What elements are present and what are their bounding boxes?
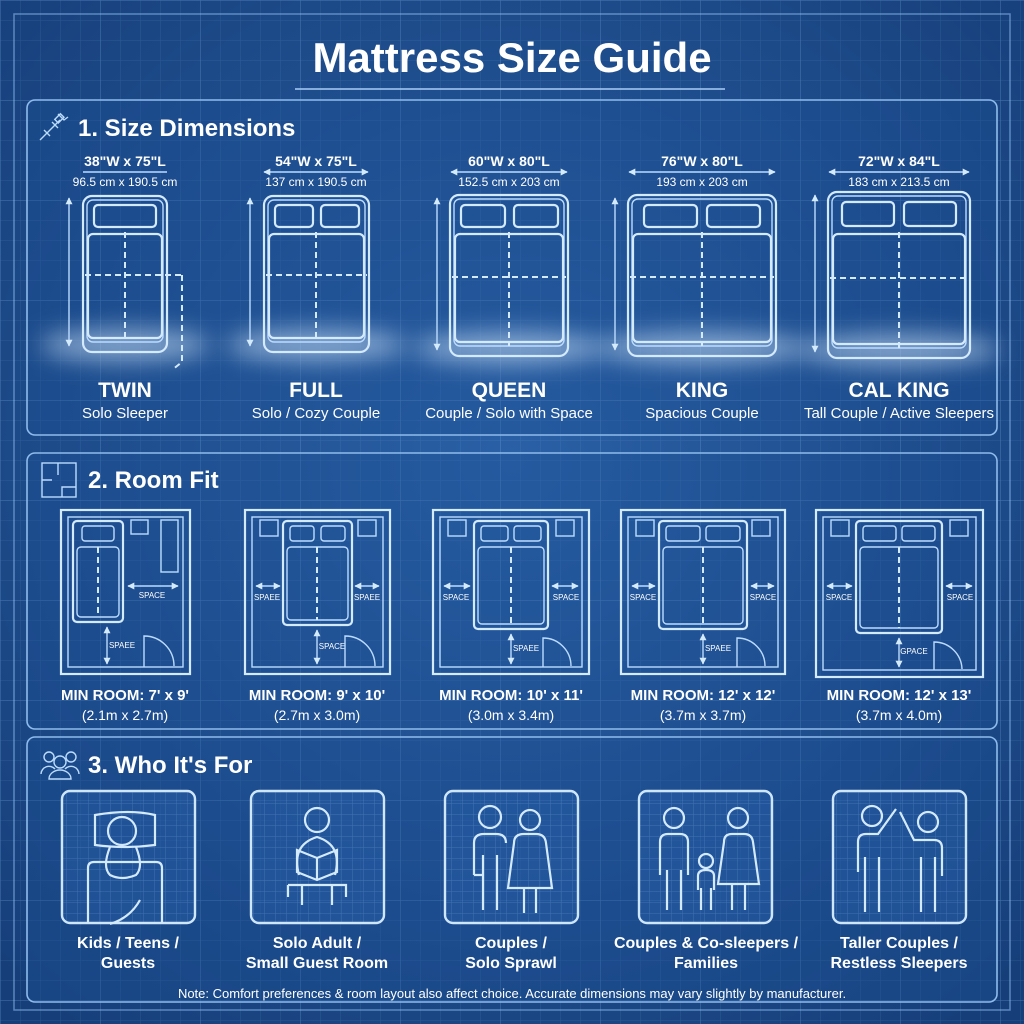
icon: people group — [41, 752, 79, 779]
room: queen: MIN ROOM: 10' x 11' — [439, 687, 583, 704]
footnote: Note: Comfort preferences & room layout also affect choice. Accurate dimensions may vary slightly by manufacturer. — [178, 986, 846, 1001]
icon: floor plan — [42, 463, 76, 497]
bed: cal king — [804, 153, 994, 422]
bed: twin: Solo Sleeper — [82, 405, 168, 422]
bed: queen: 60"W x 80"L — [468, 153, 550, 169]
card: couples: Solo Sprawl — [465, 955, 557, 972]
bed: king: 193 cm x 203 cm — [656, 175, 748, 189]
bed: full: 54"W x 75"L — [275, 153, 357, 169]
bed: twin: 96.5 cm x 190.5 cm — [73, 175, 177, 189]
room: twin: MIN ROOM: 7' x 9' — [61, 687, 189, 704]
room: cal king: MIN ROOM: 12' x 13' — [827, 687, 971, 704]
room: twin: (2.1m x 2.7m) — [82, 707, 168, 723]
card: couples: Couples / — [475, 935, 548, 952]
bed: queen: QUEEN — [472, 379, 546, 402]
bed: king — [615, 153, 776, 422]
bed: full: Solo / Cozy Couple — [252, 405, 380, 422]
card: solo adult — [246, 791, 388, 972]
bed: cal king: CAL KING — [848, 379, 950, 402]
bed: king: KING — [676, 379, 728, 402]
room: king: MIN ROOM: 12' x 12' — [631, 687, 775, 704]
room: cal king: (3.7m x 4.0m) — [856, 707, 942, 723]
room: twin: SPAEE — [109, 641, 135, 650]
room: cal king — [816, 510, 983, 723]
bed: twin — [69, 153, 182, 422]
room: queen: SPACE — [443, 593, 469, 602]
bed: cal king: Tall Couple / Active Sleepers — [804, 405, 994, 422]
bed: cal king: 183 cm x 213.5 cm — [848, 175, 950, 189]
room: cal king: SPACE — [947, 593, 973, 602]
card: kids — [62, 791, 195, 972]
card: families: Families — [674, 955, 738, 972]
room: cal king: GPACE — [900, 647, 928, 656]
room: king: SPAEE — [705, 644, 731, 653]
bed: king: Spacious Couple — [645, 405, 759, 422]
room: queen: (3.0m x 3.4m) — [468, 707, 554, 723]
bed: full: FULL — [289, 379, 343, 402]
panel: room fit — [27, 453, 997, 729]
card: taller couples — [831, 791, 968, 972]
room: king — [621, 510, 785, 723]
card: couples — [445, 791, 578, 972]
room: queen: SPACE — [553, 593, 579, 602]
room: full: SPACE — [319, 642, 345, 651]
panel: who it's for — [27, 737, 997, 1002]
bed: king: 76"W x 80"L — [661, 153, 743, 169]
panel: size dimensions — [27, 100, 999, 435]
bed: full — [250, 153, 380, 422]
room: queen — [433, 510, 589, 723]
room: full — [245, 510, 390, 723]
bed: full: 137 cm x 190.5 cm — [265, 175, 367, 189]
glow under beds — [40, 329, 999, 366]
room: king: SPACE — [630, 593, 656, 602]
bed: queen: 152.5 cm x 203 cm — [458, 175, 560, 189]
card: solo adult: Solo Adult / — [273, 935, 362, 952]
card: taller couples: Restless Sleepers — [831, 955, 968, 972]
card: families — [614, 791, 799, 972]
card: families: Couples & Co-sleepers / — [614, 935, 799, 952]
room: full: (2.7m x 3.0m) — [274, 707, 360, 723]
room: king: SPACE — [750, 593, 776, 602]
bed: queen — [425, 153, 593, 422]
room: king: (3.7m x 3.7m) — [660, 707, 746, 723]
card: solo adult: Small Guest Room — [246, 955, 388, 972]
bed: twin: 38"W x 75"L — [84, 153, 166, 169]
card: taller couples: Taller Couples / — [840, 935, 959, 952]
card: kids: Guests — [101, 955, 155, 972]
room: queen: SPAEE — [513, 644, 539, 653]
heading: who it's for: 3. Who It's For — [88, 752, 252, 779]
room: twin — [61, 510, 190, 723]
heading: size dimensions: 1. Size Dimensions — [78, 115, 295, 142]
card: kids: Kids / Teens / — [77, 935, 180, 952]
room: full: SPAEE — [354, 593, 380, 602]
bed: twin: TWIN — [98, 379, 152, 402]
room: full: SPAEE — [254, 593, 280, 602]
bed: cal king: 72"W x 84"L — [858, 153, 940, 169]
room: full: MIN ROOM: 9' x 10' — [249, 687, 385, 704]
room: cal king: SPACE — [826, 593, 852, 602]
room: twin: SPACE — [139, 591, 165, 600]
title: Mattress Size Guide — [312, 34, 712, 81]
icon: caliper — [40, 114, 68, 140]
bed: queen: Couple / Solo with Space — [425, 405, 593, 422]
heading: room fit: 2. Room Fit — [88, 467, 219, 494]
